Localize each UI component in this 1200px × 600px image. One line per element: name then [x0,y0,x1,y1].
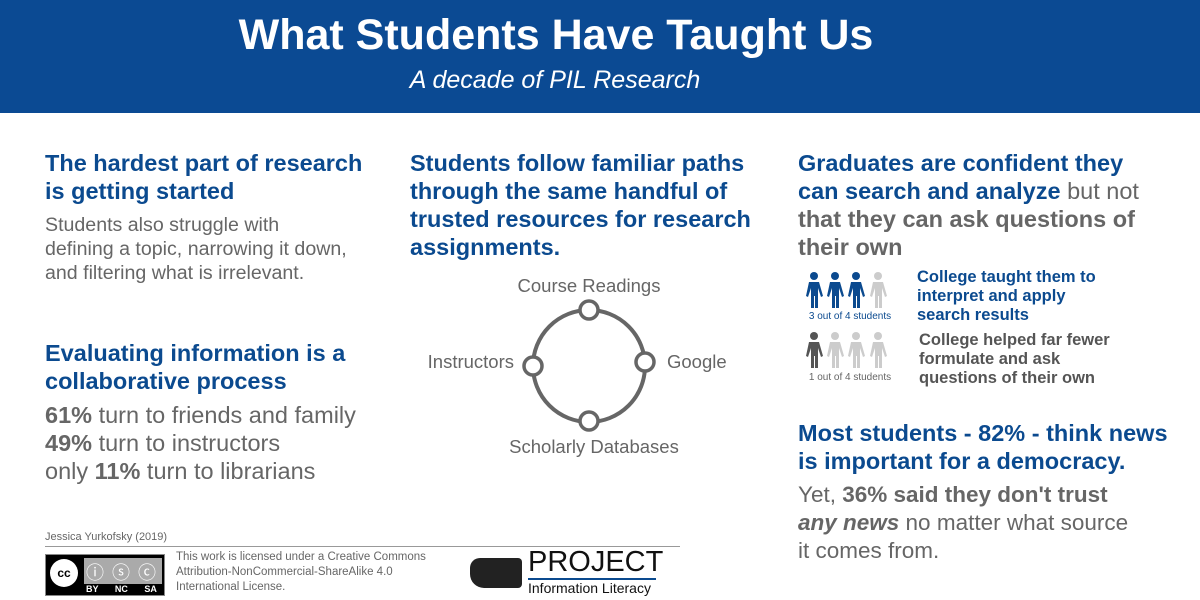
icon: people 3 of 4: 3 out of 4 students [809,311,891,322]
heading: news democracy: Most students - 82% - think news [798,420,1168,446]
heading: collaborative [45,340,346,394]
heading: hardest part: is getting started [45,178,234,204]
license text: Attribution-NonCommercial-ShareAlike 4.0 [176,566,393,578]
heading: confident: Graduates are confident they [798,150,1123,176]
cycle diagram: Course Readings [518,275,660,296]
text: helped fewer [919,331,1110,387]
panel: news [798,420,1168,563]
credit: Jessica Yurkofsky (2019) [45,531,167,543]
license text: International License. [176,581,285,593]
body: trust: any news no matter what source [798,510,1128,535]
logo: project information literacy [470,546,663,596]
heading: news democracy [798,420,1168,474]
icon: people 3 of 4 [806,272,891,382]
stats list: 61% turn to friends and family [45,402,356,428]
body text: struggles: and filtering what is irrelevant. [45,262,304,284]
body: trust [798,482,1128,563]
heading: familiar paths: Students follow familiar paths [410,150,744,176]
stats list [45,402,356,484]
heading: hardest part: The hardest part of research [45,150,362,176]
heading: confident: that they can ask questions of [798,206,1135,232]
logo: project information literacy: Information Literacy [528,580,651,596]
body text: struggles: Students also struggle with [45,214,279,236]
license text: This work is licensed under a Creative Commons [176,551,426,563]
heading: news democracy: is important for a democracy. [798,448,1125,474]
text: helped fewer: formulate and ask [919,350,1060,368]
cycle diagram: Instructors [428,351,514,372]
icon: cc license badge: BY NC SA [86,584,157,594]
heading: familiar paths: assignments. [410,234,560,260]
body text: struggles [45,214,347,284]
panel: getting started [45,150,362,284]
icon: cc license badge [45,554,165,596]
text: taught to interpret [917,268,1096,324]
panel: familiar paths [410,150,751,260]
stats list: only 11% turn to librarians [45,458,315,484]
cycle diagram: Google [667,351,727,372]
heading: confident [798,150,1139,260]
header banner [0,0,1200,113]
heading: familiar paths: through the same handful of [410,178,727,204]
license text [176,551,426,593]
heading: hardest part [45,150,362,204]
heading: collaborative: collaborative process [45,368,287,394]
panel: evaluating information [45,340,356,484]
logo: project information literacy: PROJECT [528,546,663,578]
subtitle: A decade of PIL Research [410,66,700,94]
stats list: 49% turn to instructors [45,430,280,456]
panel: graduates confident [798,150,1139,260]
heading: confident: can search and analyze but not [798,178,1139,204]
body: trust: it comes from. [798,538,939,563]
icon: cc license badge: ⓘⓢⓒ [86,563,164,583]
text: taught to interpret: College taught them to [917,268,1096,286]
text: taught to interpret: search results [917,306,1029,324]
text: helped fewer: questions of their own [919,369,1095,387]
body: trust: Yet, 36% said they don't trust [798,482,1108,507]
cycle diagram [428,275,727,457]
heading: familiar paths: trusted resources for research [410,206,751,232]
heading: confident: their own [798,234,902,260]
heading: collaborative: Evaluating information is a [45,340,345,366]
body text: struggles: defining a topic, narrowing it down, [45,238,347,260]
text: taught to interpret: interpret and apply [917,287,1066,305]
cycle diagram: Scholarly Databases [509,436,679,457]
icon: cc license badge: cc [57,566,71,580]
heading: familiar paths [410,150,751,260]
title: What Students Have Taught Us [239,11,873,59]
text: helped fewer: College helped far fewer [919,331,1110,349]
